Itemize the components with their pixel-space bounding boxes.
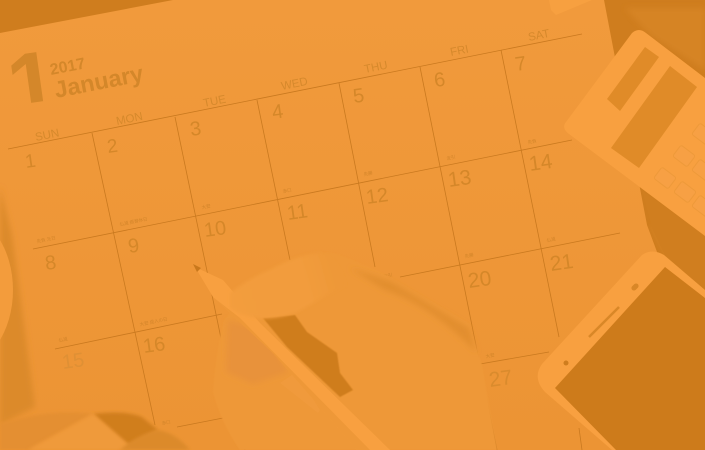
other hand at bottom left: [0, 412, 190, 450]
date numbers: 16: [142, 333, 167, 358]
weekday labels: WED: [280, 76, 309, 93]
paper corner under pencil: [280, 372, 320, 413]
big month number: 1: [1, 31, 64, 135]
phone screen: [555, 267, 705, 450]
date numbers: 5: [352, 85, 366, 108]
tiny almanac notes: 赤口: [161, 419, 171, 427]
weekday labels: SAT: [527, 28, 551, 44]
main display panel: [611, 66, 697, 168]
hand silhouette: [213, 253, 497, 450]
tiny almanac notes: 赤口: [282, 187, 292, 195]
date numbers: 6: [433, 69, 447, 92]
calculator keys: [654, 123, 705, 217]
date numbers: 27: [487, 366, 514, 392]
tiny almanac notes: 仏滅 振替休日: [119, 215, 148, 228]
pencil tip: [193, 264, 201, 272]
date numbers: 12: [365, 184, 390, 209]
year: 2017: [49, 55, 87, 79]
date numbers: 10: [203, 217, 228, 242]
small paper object at top: [549, 0, 592, 15]
weekday labels: SUN: [34, 127, 60, 144]
date numbers: 4: [271, 101, 285, 124]
date numbers: 15: [61, 349, 86, 374]
writing hand: [213, 253, 497, 450]
camera dot: [564, 360, 568, 366]
tiny almanac notes: 友引: [383, 271, 393, 280]
shadow: [93, 413, 158, 450]
date numbers: 9: [127, 235, 141, 258]
date numbers: [24, 53, 575, 392]
date numbers: 7: [514, 53, 528, 76]
pencil body: [195, 267, 390, 450]
month heading: [11, 52, 142, 103]
weekday labels: [34, 28, 551, 144]
weekday labels: TUE: [202, 94, 227, 110]
date numbers: 8: [44, 252, 58, 275]
weekday labels: FRI: [449, 43, 470, 59]
wood grain: [625, 8, 705, 290]
calculator body: [564, 30, 705, 236]
tiny almanac notes: 大安: [201, 202, 212, 211]
tiny almanac notes: [36, 137, 557, 427]
calculator: [564, 30, 705, 290]
pencil: [193, 264, 390, 450]
shaded streak on back of hand: [350, 268, 476, 352]
upper finger over pencil: [230, 253, 345, 318]
tiny almanac notes: 仏滅: [58, 335, 69, 344]
date numbers: 21: [548, 250, 575, 276]
date numbers: 14: [527, 150, 554, 176]
tiny almanac notes: 大安: [485, 351, 496, 360]
round object at left edge: [0, 214, 13, 366]
small display panel: [607, 47, 659, 111]
pencil shaded side: [213, 297, 370, 450]
lower palm shade: [226, 320, 288, 384]
date numbers: 1: [24, 151, 37, 173]
fingertip: [120, 430, 190, 450]
sensor: [630, 282, 640, 292]
smartphone: [538, 252, 705, 450]
palm: [0, 412, 93, 450]
tiny almanac notes: 先負 元日: [36, 234, 56, 245]
tiny almanac notes: 先勝: [363, 169, 374, 178]
date numbers: 11: [286, 200, 309, 225]
month name: January: [52, 60, 145, 103]
left shadow on paper: [0, 187, 35, 425]
date numbers: 20: [466, 267, 493, 293]
phone body: [538, 252, 705, 450]
tiny almanac notes: 友引: [446, 153, 456, 162]
tiny almanac notes: 先負: [527, 137, 538, 146]
tiny almanac notes: 先勝: [464, 251, 475, 260]
date numbers: 3: [189, 118, 203, 141]
finger shadow: [263, 315, 353, 397]
tiny almanac notes: 大安 成人の日: [139, 315, 168, 328]
weekday labels: MON: [115, 111, 144, 128]
lighter finger: [28, 414, 135, 450]
weekday labels: THU: [363, 59, 389, 76]
tiny almanac notes: 仏滅: [546, 235, 557, 244]
date numbers: 13: [446, 166, 473, 192]
speaker slot: [589, 307, 619, 337]
calculator shadow edge: [642, 190, 705, 290]
date numbers: 2: [106, 136, 119, 158]
